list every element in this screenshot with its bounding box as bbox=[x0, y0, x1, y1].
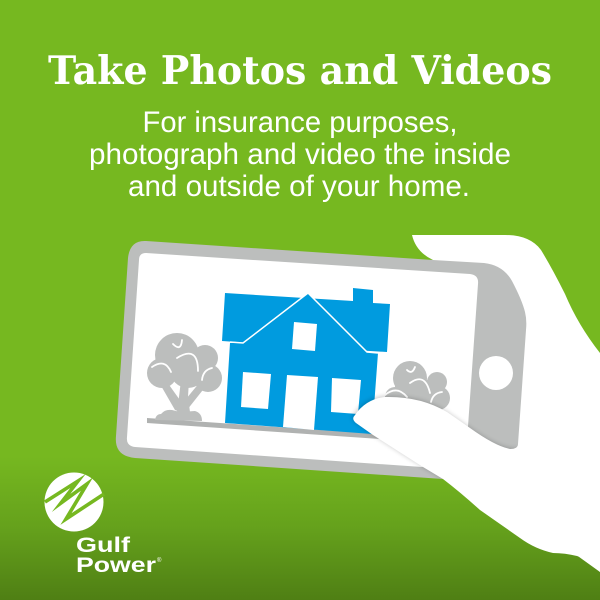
icon: bush bbox=[385, 361, 450, 410]
title: Take Photos and Videos bbox=[48, 48, 552, 94]
right window bbox=[331, 378, 361, 414]
icon: house bbox=[222, 288, 390, 434]
roof bbox=[222, 288, 390, 352]
logo wordmark: ® bbox=[157, 557, 162, 564]
logo wordmark bbox=[76, 534, 162, 577]
intro text bbox=[89, 106, 511, 203]
intro text: photograph and video the inside bbox=[89, 138, 511, 171]
intro text: and outside of your home. bbox=[128, 170, 470, 203]
phone home button bbox=[479, 356, 513, 390]
intro text: For insurance purposes, bbox=[142, 106, 458, 139]
door bbox=[283, 375, 318, 430]
ground line bbox=[147, 418, 380, 439]
finger and palm bbox=[353, 397, 600, 572]
icon: tree bbox=[147, 333, 222, 421]
roof line bbox=[230, 293, 378, 353]
finger shadow bbox=[351, 394, 516, 479]
house walls bbox=[225, 293, 378, 434]
left window bbox=[241, 372, 271, 409]
phone screen bbox=[127, 253, 478, 467]
logo wordmark: Power bbox=[76, 554, 156, 577]
logo wordmark: Gulf bbox=[76, 534, 131, 557]
phone body bbox=[116, 241, 526, 479]
hand back bbox=[412, 235, 600, 572]
illustration: hand and phone bbox=[116, 235, 600, 572]
logo mark bbox=[44, 472, 104, 532]
upper window bbox=[292, 322, 317, 351]
logo: Gulf Power bbox=[44, 472, 162, 577]
